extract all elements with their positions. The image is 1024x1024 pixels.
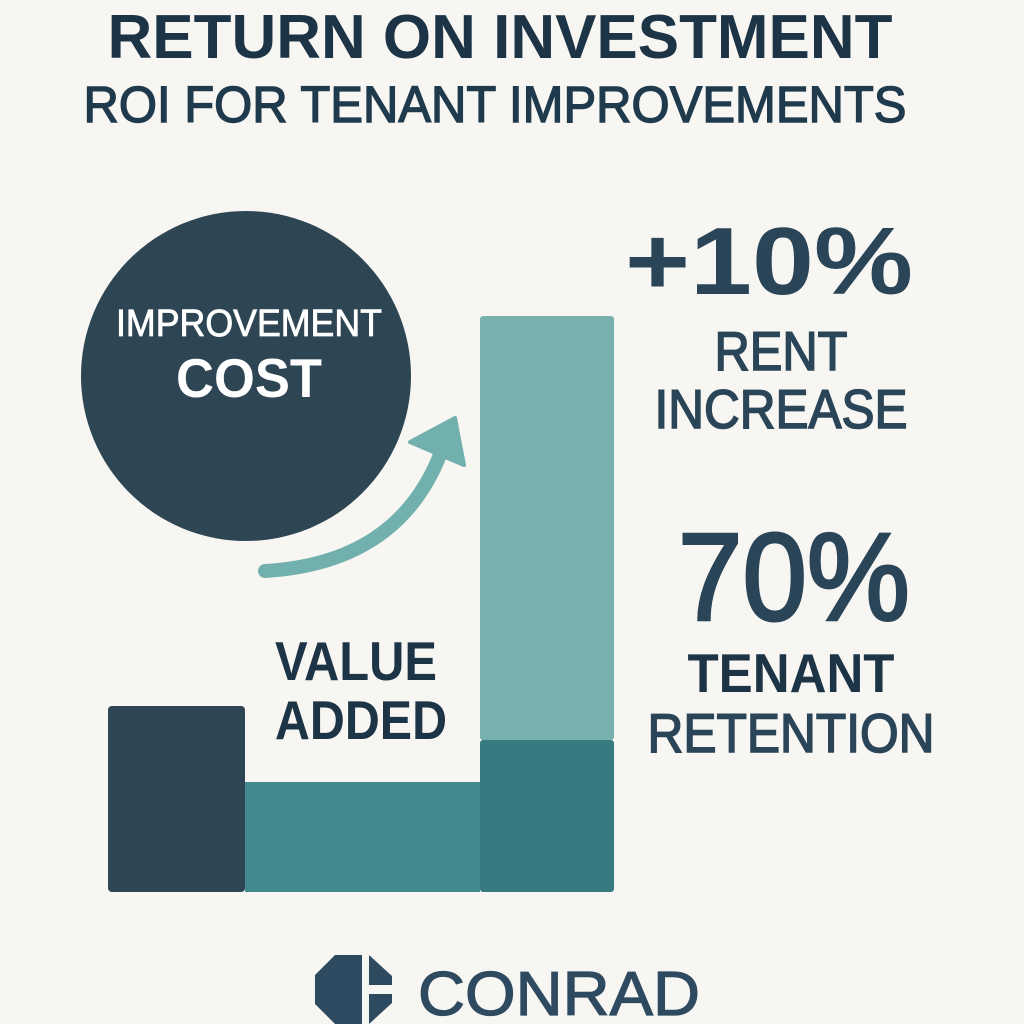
logo: [315, 955, 700, 1024]
stat: tenant retention: RETENTION: [648, 702, 934, 764]
value added label: VALUE: [275, 630, 437, 692]
stat: tenant retention: 70%: [678, 509, 910, 647]
stat: rent increase: +10%: [625, 208, 913, 315]
circle: improvement cost: IMPROVEMENT: [116, 303, 382, 345]
circle: improvement cost: COST: [176, 347, 322, 409]
bar chart: [108, 316, 614, 892]
stat: rent increase: RENT: [714, 320, 848, 382]
stat: tenant retention: TENANT: [688, 642, 894, 704]
stat: rent increase: [625, 208, 913, 440]
circle: improvement cost: [81, 211, 411, 541]
stat: rent increase: INCREASE: [654, 378, 908, 440]
arrow: [265, 418, 464, 571]
title: RETURN ON INVESTMENT: [108, 3, 893, 72]
subtitle: ROI FOR TENANT IMPROVEMENTS: [84, 76, 906, 133]
stat: tenant retention: [648, 509, 934, 764]
value added label: [275, 630, 447, 751]
value added label: ADDED: [275, 689, 447, 751]
